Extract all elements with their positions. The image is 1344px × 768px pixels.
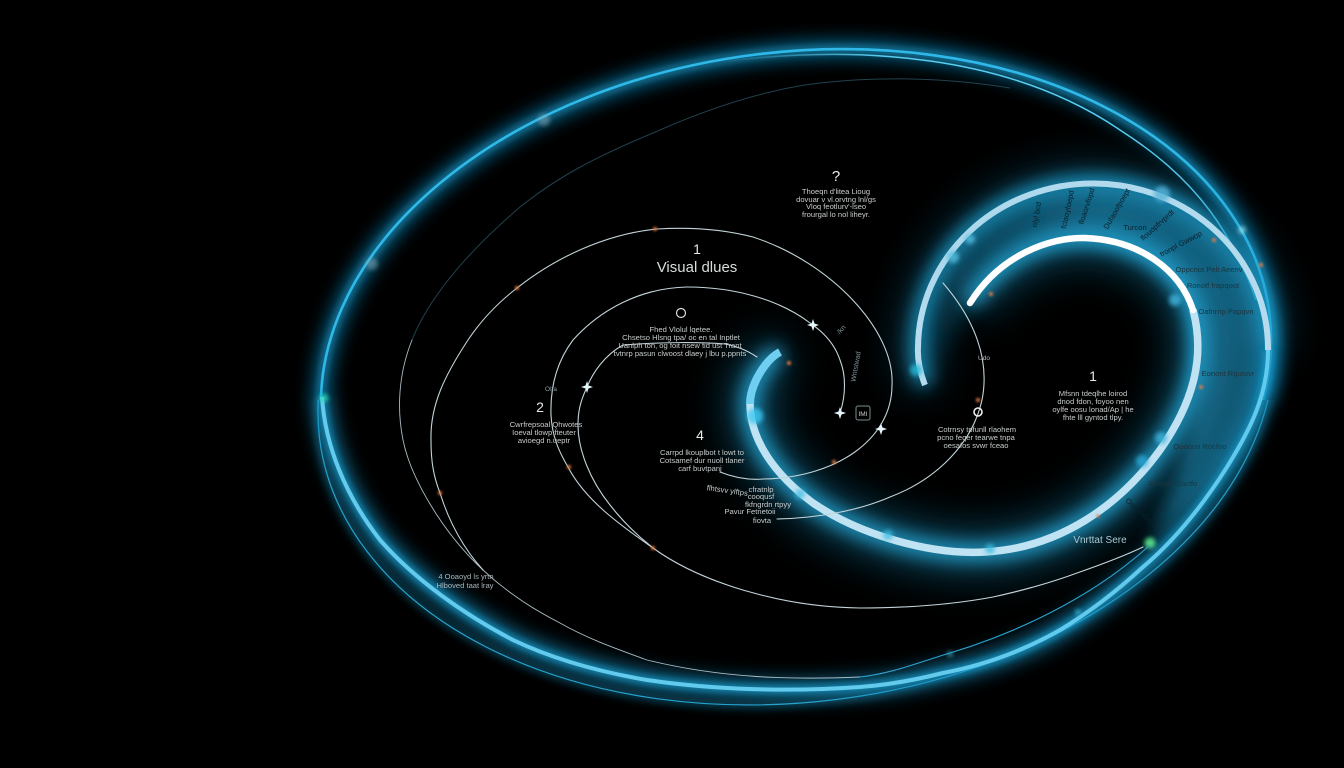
label: right of spiral tip bbox=[836, 324, 870, 420]
heading: Visual clues bbox=[657, 241, 737, 276]
thin spiral lines bbox=[400, 79, 1150, 678]
text block: top: dovuar v vl.orvtng lnl/gs bbox=[796, 195, 876, 204]
text block: lower right of line bbox=[937, 355, 1016, 450]
label: bottom left: 4 Ooaoyd ls yrtn bbox=[438, 572, 494, 581]
warm sparks bbox=[438, 227, 1263, 550]
dark labels on the band: Dufaoofpoept bbox=[1102, 186, 1133, 231]
label: bottom left: Hlboved taat lray bbox=[437, 581, 494, 590]
text cluster: bottom center labels: flhtsvv ylftps bbox=[706, 483, 749, 498]
text block: 1 right bbox=[1052, 368, 1134, 422]
text block: 2 bbox=[510, 386, 582, 445]
text block: top: ? bbox=[832, 168, 840, 185]
text block: 2: Olta bbox=[545, 386, 557, 393]
dark labels on the band bbox=[1030, 186, 1255, 528]
text block: lower right of line: Udo bbox=[978, 355, 990, 362]
dark labels on the band: Oafnrnp Papqvn bbox=[1198, 307, 1254, 316]
text block: top: Vloq feotlurv'-lseo bbox=[806, 202, 866, 211]
text block: 4: 4 bbox=[696, 427, 704, 443]
dark labels on the band: Ouoonn Rocfoo bbox=[1173, 442, 1227, 451]
inner spiral band bbox=[750, 238, 1198, 552]
inner thin spiral with callout arrow bbox=[578, 343, 757, 548]
text block: top bbox=[796, 168, 876, 219]
heading: Visual clues: 1 bbox=[693, 241, 701, 257]
dark labels on the band: Eonont Rqutovr bbox=[1202, 369, 1255, 378]
dark labels on the band: nlyl bcd bbox=[1030, 201, 1043, 228]
label: right of spiral tip: /kn bbox=[836, 324, 848, 336]
text block: 4 bbox=[660, 427, 745, 473]
text block: center top with icon: Chsetso Hlsng tpa/ oc en tal Inptlet bbox=[622, 333, 741, 342]
text block: 1 right: oylfe oosu lonad/Ap | he bbox=[1052, 405, 1134, 414]
text cluster: bottom center labels: cfratnlp bbox=[749, 485, 773, 494]
text block: top: frourgal lo nol liheyr. bbox=[802, 210, 870, 219]
blue continuation bbox=[860, 545, 1150, 677]
outer thin ring, lower part bbox=[311, 400, 1274, 712]
text cluster: bottom center labels bbox=[706, 483, 791, 525]
dark labels on the band: tronpl Gwwop bbox=[1158, 229, 1203, 259]
faint outer line bbox=[412, 79, 1010, 340]
outer ring glow, upper part bbox=[301, 28, 1292, 408]
text block: 2: Ioeval tlowp fteuter bbox=[512, 428, 576, 437]
outer ring core, upper part bbox=[313, 41, 1278, 400]
dark labels on the band: Turcon bbox=[1123, 223, 1147, 232]
dark labels on the band: floaorvfopd bbox=[1077, 187, 1097, 225]
text block: 2: Cwrfrepsoal Qhwotes bbox=[510, 420, 582, 429]
label: bottom left bbox=[437, 572, 494, 590]
text block: 4: carf buvtpanj bbox=[678, 464, 722, 473]
text block: lower right of line: pcno feqer tearwe tnpa bbox=[937, 433, 1016, 442]
text block: 1 right: Mfsnn tdeqlhe loirod bbox=[1059, 389, 1127, 398]
heading: Visual clues: Visual dlues bbox=[657, 259, 737, 276]
faint outer line lower bbox=[400, 340, 860, 678]
text block: 4: Carrpd lkouplbot t lowt to bbox=[660, 448, 744, 457]
outer spiral band bbox=[322, 183, 1268, 690]
dark labels on the band: fclaoyfoepd bbox=[1059, 190, 1076, 229]
crescent glow between bands bbox=[918, 183, 1268, 540]
dark labels on the band: Oppcnot Pelt Aeenv bbox=[1175, 265, 1243, 274]
text block: center top with icon: Fhed Vlolul lqetee. bbox=[650, 325, 712, 334]
text cluster: bottom center labels: Pavur Fetnetoii bbox=[724, 507, 776, 516]
text cluster: bottom center labels: fkfngrdn rtpyy bbox=[745, 500, 791, 509]
dark labels on the band: Eoqoot Ooctfo bbox=[1149, 479, 1197, 488]
glowing nodes on bands bbox=[320, 114, 1246, 656]
dark labels on the band: flouopfrvprdt bbox=[1139, 207, 1177, 243]
middle spiral with arrow tip bbox=[551, 287, 1143, 608]
label: right of spiral tip: IMI bbox=[858, 411, 868, 418]
text block: 1 right: 1 bbox=[1089, 368, 1097, 384]
text cluster: bottom center labels: cooqusf bbox=[748, 492, 775, 501]
text block: lower right of line: Cotrnsy tpfunll rlaohem bbox=[938, 425, 1016, 434]
outer thin spiral bbox=[431, 228, 892, 570]
line sparkles bbox=[581, 319, 887, 435]
dark labels on the band: Ronotf frapqoot bbox=[1187, 281, 1240, 290]
second line of ring, top right bbox=[732, 54, 1257, 300]
text block: lower right of line: oesafos svwr fceao bbox=[944, 441, 1008, 450]
text block: top: Thoeqn d'litea Lioug bbox=[802, 187, 870, 196]
text block: 2: avioegd n.ueptr bbox=[518, 436, 571, 445]
text cluster: bottom center labels: fiovta bbox=[753, 516, 772, 525]
right thin spiral bbox=[777, 283, 984, 519]
text block: center top with icon bbox=[614, 308, 746, 358]
text block: 4: Cotsamef dur nuoll tlaner bbox=[660, 456, 745, 465]
text block: center top with icon: tvtnrp pasun clwoost dlaey j lbu p.ppnts bbox=[614, 349, 746, 358]
label: right of spiral tip: Wntstwad bbox=[850, 351, 863, 382]
label: bottom right: Vnrttat Sere bbox=[1073, 535, 1127, 546]
text block: center top with icon: Uanlph ton, og foit nsew tid ust Trant bbox=[618, 341, 743, 350]
text block: 1 right: dnod fdon, foyoo nen bbox=[1057, 397, 1129, 406]
dark labels on the band: Oooaotboo bbox=[1124, 496, 1158, 528]
text block: 1 right: fhte lll gyntod tlpy. bbox=[1063, 413, 1123, 422]
text block: 2: 2 bbox=[536, 399, 544, 415]
